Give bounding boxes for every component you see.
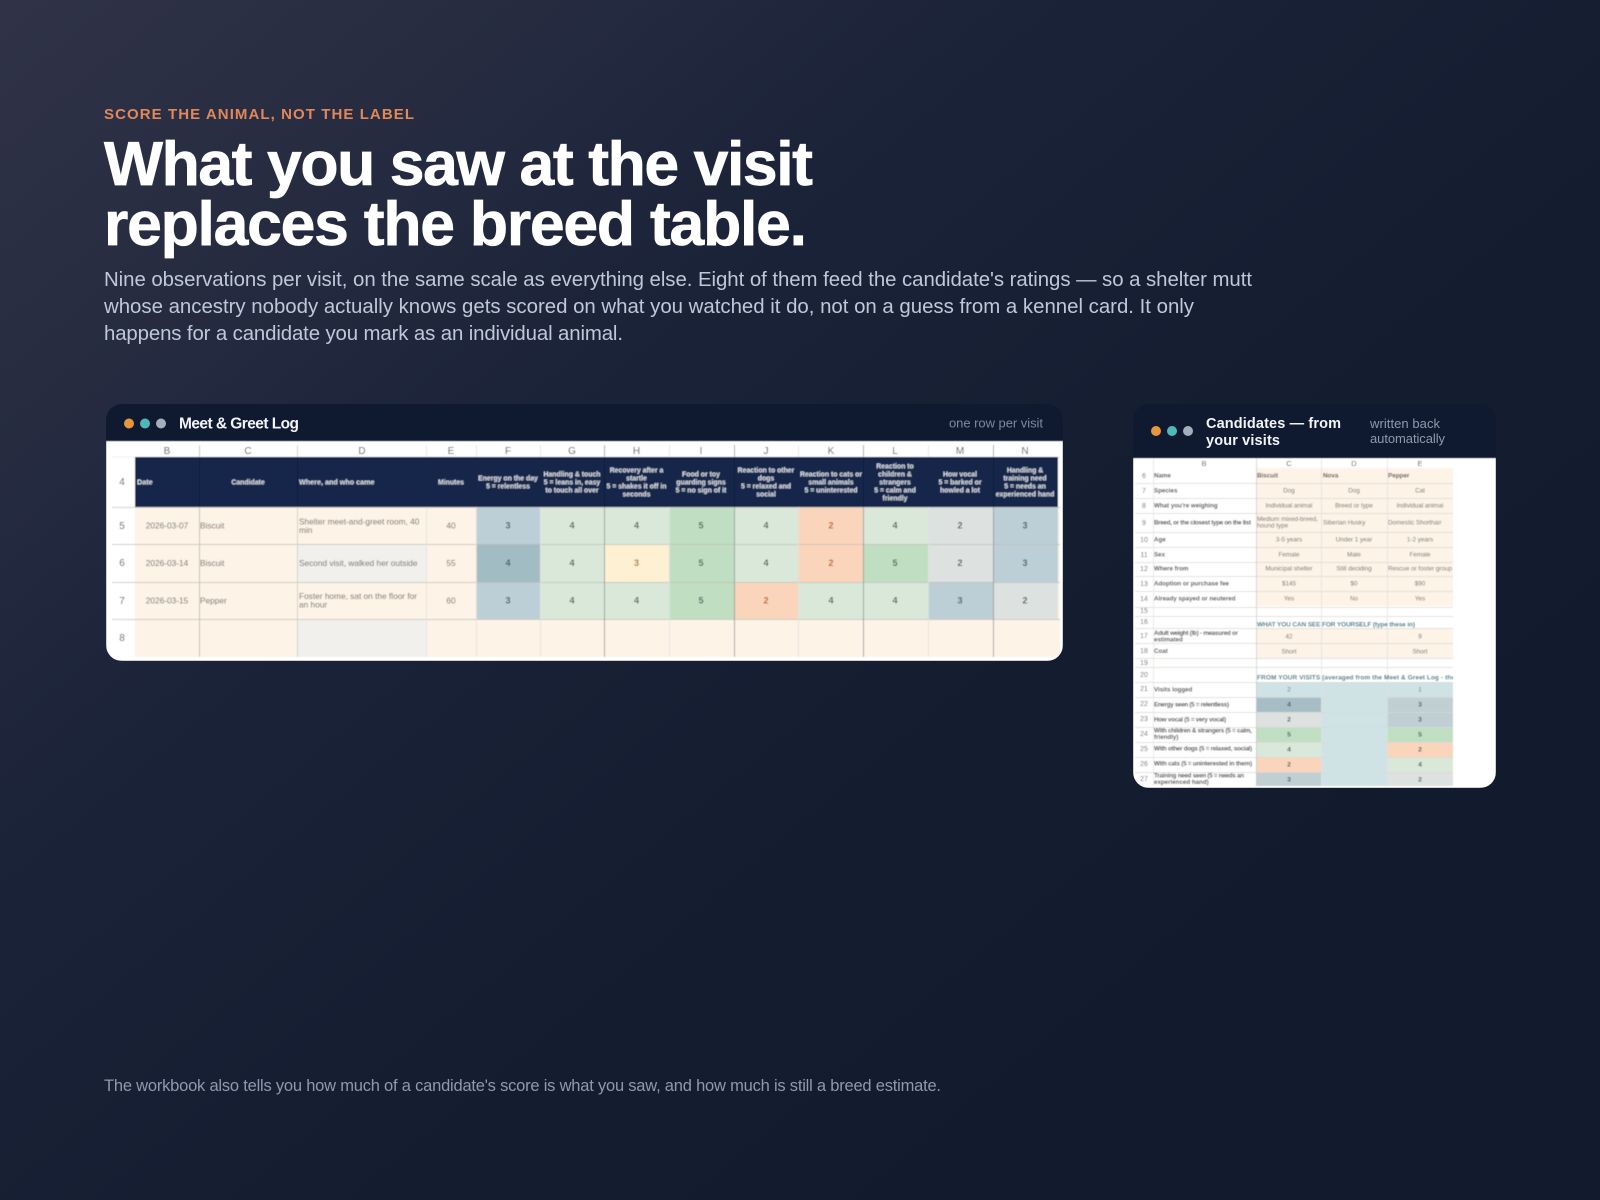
header row: 5 = calm and — [874, 488, 916, 494]
row labels: Visits logged — [1154, 686, 1193, 694]
header row: Handling & — [1007, 468, 1043, 474]
column letters: C — [244, 446, 252, 457]
row numbers: 11 — [1140, 552, 1148, 559]
row labels: With children & strangers (5 = calm, — [1154, 728, 1252, 734]
row 6: Biscuit — [200, 558, 225, 568]
section: what you can see for yourself: Short — [1281, 648, 1297, 656]
row 7: 4 — [892, 596, 898, 606]
header row: 5 = barked or — [938, 480, 982, 486]
row labels: Sex — [1154, 552, 1166, 558]
profile values: Yes — [1284, 596, 1294, 602]
profile values: Domestic Shorthair — [1388, 520, 1442, 526]
header row: 5 = needs an — [1004, 484, 1046, 490]
column letters — [1202, 460, 1422, 467]
row labels: Species — [1154, 488, 1178, 494]
section: from your visits: 2 — [1287, 686, 1291, 694]
row labels: With other dogs (5 = relaxed, social) — [1154, 746, 1252, 752]
row 7: 5 — [698, 596, 704, 606]
row 6: 4 — [505, 558, 511, 568]
header row: Minutes — [438, 480, 464, 486]
profile values: Under 1 year — [1336, 536, 1372, 544]
profile values: Pepper — [1388, 472, 1410, 480]
profile values: Municipal shelter — [1265, 566, 1313, 572]
header row: Reaction to cats or — [800, 472, 862, 478]
profile values: Dog — [1348, 488, 1360, 494]
column letters: F — [505, 446, 511, 457]
row labels: Already spayed or neutered — [1154, 596, 1236, 602]
header row: small animals — [808, 480, 854, 486]
row numbers: 23 — [1140, 716, 1148, 723]
row labels: Breed, or the closest type on the list — [1154, 520, 1251, 526]
profile values: Female — [1410, 552, 1431, 558]
profile values: Still deciding — [1336, 566, 1372, 572]
column letters — [164, 446, 1028, 455]
header row: social — [756, 492, 776, 498]
grid lines — [112, 445, 1060, 657]
section: from your visits: 5 — [1287, 732, 1291, 738]
profile values: Rescue or foster group — [1388, 566, 1453, 572]
profile values: No — [1350, 596, 1359, 602]
row 5: 4 — [892, 520, 898, 530]
row 5: Shelter meet-and-greet room, 40 — [299, 516, 420, 526]
title: What you saw at the visit — [104, 129, 813, 199]
section: from your visits: 3 — [1287, 776, 1291, 784]
profile values: Breed or type — [1335, 502, 1373, 510]
row labels: experienced hand) — [1154, 779, 1209, 786]
section: what you can see for yourself: Short — [1412, 648, 1428, 656]
intro paragraph: whose ancestry nobody actually knows gets scored on what you watched it do, not on a guess from a kennel card. It only — [103, 296, 1195, 318]
row 7: Foster home, sat on the floor for — [299, 591, 417, 601]
intro paragraph: happens for a candidate you mark as an individual animal. — [104, 323, 623, 345]
panel: Meet & Greet Log — [106, 404, 1063, 661]
panel header: Candidates: Candidates — from — [1206, 416, 1341, 432]
row numbers: 6 — [119, 558, 125, 569]
row numbers: 18 — [1140, 648, 1148, 655]
row numbers: 13 — [1140, 581, 1148, 588]
row 6 — [146, 559, 1028, 568]
row numbers: 14 — [1140, 596, 1148, 603]
column letters: H — [633, 446, 640, 457]
profile values: Siberian Husky — [1323, 520, 1366, 526]
row 6: 4 — [569, 558, 575, 568]
header row: Candidate — [231, 480, 265, 486]
row numbers: 4 — [119, 477, 125, 488]
panel header: Meet & Greet Log — [124, 416, 1043, 432]
header row: training need — [1003, 476, 1047, 482]
row 5: 4 — [569, 520, 575, 530]
data cell fills — [135, 507, 1060, 657]
header row — [135, 457, 1058, 507]
row labels: friendly) — [1154, 734, 1178, 741]
column letters: K — [828, 446, 835, 457]
profile values: Cat — [1415, 488, 1425, 494]
panel header: Meet & Greet Log: one row per visit — [949, 416, 1043, 430]
profile values: Medium mixed-breed, — [1257, 516, 1318, 523]
profile values: Dog — [1283, 488, 1295, 494]
row labels: Adult weight (lb) - measured or — [1154, 630, 1239, 637]
header row: 5 = relentless — [486, 484, 530, 490]
column letters: B — [1201, 459, 1207, 468]
row 5: 5 — [698, 520, 704, 530]
row numbers: 10 — [1140, 537, 1148, 544]
profile values: $145 — [1282, 580, 1296, 588]
section: from your visits: 4 — [1287, 702, 1291, 708]
header row: Reaction to other — [738, 468, 795, 474]
intro paragraph — [103, 269, 1252, 345]
title — [104, 129, 813, 259]
row 5: min — [299, 525, 313, 535]
row 6: 3 — [634, 558, 639, 568]
row numbers: 5 — [119, 521, 125, 532]
row labels: estimated — [1154, 636, 1183, 644]
row numbers: 15 — [1140, 608, 1148, 615]
section: what you can see for yourself — [1257, 622, 1428, 656]
row 5: 40 — [446, 520, 456, 530]
title: replaces the breed table. — [104, 189, 807, 259]
header row: 5 = relaxed and — [741, 484, 791, 490]
row numbers: 20 — [1140, 672, 1148, 679]
row 6: 4 — [763, 558, 769, 568]
header row: Food or toy — [682, 472, 720, 478]
column letters: M — [956, 446, 964, 457]
row 6: 55 — [446, 558, 456, 568]
row labels: How vocal (5 = very vocal) — [1154, 716, 1226, 724]
header row: startle — [626, 476, 647, 482]
header row: Handling & touch — [543, 472, 601, 478]
header row: howled a lot — [940, 488, 981, 494]
header row: Date — [137, 478, 153, 486]
row labels: Adoption or purchase fee — [1154, 580, 1230, 588]
row numbers: 8 — [119, 633, 125, 644]
row numbers — [1140, 473, 1148, 783]
column letters: E — [448, 446, 455, 457]
header row: children & — [878, 472, 912, 478]
spreadsheet: candidates — [1133, 458, 1496, 788]
row 5: 2 — [828, 520, 834, 530]
profile values: 3-5 years — [1276, 536, 1302, 544]
header row: How vocal — [943, 472, 977, 478]
row labels: What you're weighing — [1154, 502, 1218, 510]
section: from your visits: 3 — [1418, 716, 1422, 724]
row numbers: 7 — [119, 596, 125, 607]
header row: Where, and who came — [299, 478, 374, 486]
row numbers: 12 — [1140, 566, 1148, 573]
row labels — [1154, 472, 1252, 786]
section: from your visits: 2 — [1418, 776, 1422, 784]
row numbers: 27 — [1140, 776, 1148, 783]
row labels: With cats (5 = uninterested in them) — [1154, 760, 1252, 768]
header row: seconds — [623, 492, 651, 498]
profile values: Biscuit — [1257, 472, 1279, 480]
section: from your visits: 2 — [1287, 762, 1291, 768]
row 6: 3 — [1022, 558, 1028, 568]
profile values: Female — [1278, 552, 1300, 558]
panel header: Candidates — [1151, 416, 1446, 449]
column letters: G — [568, 446, 576, 457]
row 7: 2 — [1022, 596, 1028, 606]
section: what you can see for yourself: 9 — [1418, 634, 1422, 640]
section: from your visits: 5 — [1418, 732, 1422, 738]
row 5: 3 — [1022, 520, 1028, 530]
spreadsheet: visit log — [106, 441, 1063, 661]
column letters: J — [764, 446, 768, 457]
header row: Recovery after a — [610, 468, 663, 474]
section: from your visits: 3 — [1418, 702, 1422, 708]
header row: dogs — [758, 476, 774, 482]
row 7: 4 — [569, 596, 575, 606]
panel header: Candidates: your visits — [1206, 433, 1280, 449]
profile values: Yes — [1415, 596, 1425, 602]
row 7: 4 — [828, 596, 834, 606]
row 6: 2026-03-14 — [146, 558, 189, 568]
panel header: Candidates: automatically — [1370, 431, 1446, 446]
profile values: Individual animal — [1397, 502, 1443, 510]
row labels: Where from — [1154, 566, 1189, 572]
row numbers: 8 — [1142, 503, 1146, 510]
profile values: $90 — [1415, 580, 1426, 588]
section: from your visits: FROM YOUR VISITS (averaged from the Meet & Greet Log - the — [1257, 674, 1455, 682]
column letters: N — [1021, 446, 1029, 457]
row labels: Training need seen (5 = needs an — [1154, 772, 1244, 780]
header row: 5 = leans in, easy — [544, 480, 600, 486]
row 5 — [146, 518, 1028, 534]
panel: Candidates from your visits — [1133, 404, 1496, 788]
row numbers: 26 — [1140, 761, 1148, 768]
row labels: Coat — [1154, 648, 1168, 655]
grid lines — [1135, 458, 1453, 786]
footer note: The workbook also tells you how much of a candidate's score is what you saw, and how much is still a breed estimate. — [104, 1077, 941, 1095]
column letters: C — [1286, 459, 1292, 468]
row labels: Age — [1154, 536, 1166, 544]
header row: guarding signs — [676, 480, 726, 486]
column letters: D — [1351, 459, 1357, 468]
profile values: Individual animal — [1266, 502, 1312, 510]
panel header: Candidates: written back — [1369, 416, 1440, 431]
row numbers: 19 — [1140, 660, 1148, 667]
profile values — [1257, 472, 1453, 602]
row 7: Pepper — [200, 596, 227, 606]
row numbers — [119, 477, 125, 644]
row numbers: 22 — [1140, 701, 1148, 708]
section: what you can see for yourself: WHAT YOU CAN SEE FOR YOURSELF (type these in) — [1257, 622, 1415, 628]
profile values: Male — [1347, 552, 1361, 558]
row 7: 2026-03-15 — [146, 596, 189, 606]
row 6: 2 — [957, 558, 963, 568]
row labels: Energy seen (5 = relentless) — [1154, 702, 1229, 708]
cell fills — [1256, 468, 1453, 786]
row 7: 4 — [634, 596, 639, 606]
section: what you can see for yourself: 42 — [1285, 634, 1293, 640]
panel header: Meet & Greet Log: Meet & Greet Log — [179, 416, 299, 432]
row numbers: 25 — [1140, 746, 1148, 753]
header row: friendly — [883, 496, 908, 502]
header row: 5 = shakes it off in — [607, 484, 666, 490]
row 5: 2026-03-07 — [146, 520, 189, 530]
intro paragraph: Nine observations per visit, on the same scale as everything else. Eight of them feed the candidate's ratings — so a shelter mutt — [104, 269, 1252, 291]
header row: Energy on the day — [478, 476, 538, 482]
profile values: 1-2 years — [1407, 536, 1433, 544]
row 5: 2 — [957, 520, 963, 530]
row 5: 3 — [505, 520, 511, 530]
row 7 — [146, 592, 1028, 608]
header row: Reaction to — [876, 464, 914, 470]
row numbers: 6 — [1142, 473, 1146, 480]
header row: experienced hand — [996, 492, 1054, 498]
row 6: 2 — [828, 558, 834, 568]
row 6: 5 — [698, 558, 704, 568]
row labels: Name — [1154, 472, 1171, 480]
header row: to touch all over — [545, 488, 599, 494]
row 5: 4 — [634, 520, 639, 530]
row 6: Second visit, walked her outside — [299, 558, 418, 568]
row numbers: 24 — [1140, 731, 1148, 738]
row 7: 2 — [763, 596, 769, 606]
section: from your visits: 1 — [1418, 686, 1422, 694]
row 7: 60 — [446, 596, 456, 606]
row 7: an hour — [299, 600, 327, 610]
column letters: B — [164, 446, 171, 457]
section: from your visits: 4 — [1287, 746, 1291, 754]
profile values: Nova — [1323, 472, 1339, 480]
column letters: I — [700, 446, 702, 457]
header row: 5 = no sign of it — [676, 488, 727, 494]
section: from your visits: 2 — [1418, 746, 1422, 754]
row 7: 3 — [505, 596, 511, 606]
row numbers: 17 — [1140, 633, 1148, 640]
column letters: E — [1417, 459, 1423, 468]
row 6: 5 — [892, 558, 898, 568]
row numbers: 9 — [1142, 520, 1146, 527]
row 7: 3 — [957, 596, 963, 606]
row 5: Biscuit — [200, 520, 225, 530]
row numbers: 7 — [1142, 488, 1146, 495]
header row: strangers — [879, 480, 911, 486]
row numbers: 16 — [1140, 619, 1148, 626]
section: from your visits: 2 — [1287, 716, 1291, 724]
profile values: hound type — [1257, 522, 1289, 530]
header row: 5 = uninterested — [804, 488, 858, 494]
column letters: L — [892, 446, 898, 457]
eyebrow: SCORE THE ANIMAL, NOT THE LABEL — [104, 106, 414, 123]
section: from your visits: 4 — [1418, 762, 1422, 768]
row 5: 4 — [763, 520, 769, 530]
profile values: $0 — [1350, 580, 1358, 588]
section: from your visits — [1257, 674, 1455, 784]
row numbers: 21 — [1140, 686, 1148, 693]
column letters: D — [358, 446, 366, 457]
